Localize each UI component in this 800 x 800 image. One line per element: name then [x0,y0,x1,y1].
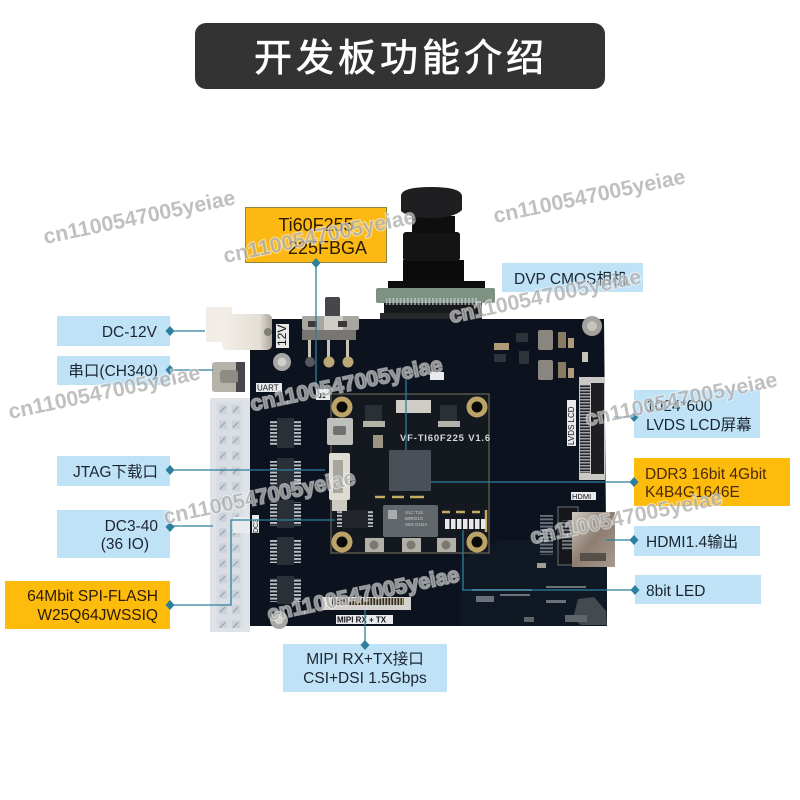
silkscreen labels: HDMI [572,492,591,501]
FPGA chip [389,450,431,491]
label: LVDS LCD [630,390,760,438]
module mounting holes [334,399,485,550]
DDR3 chip: S1C T1S [405,510,423,515]
watermarks: cn1100547005yeiae [447,264,643,328]
watermarks [6,164,779,626]
watermarks: cn1100547005yeiae [221,204,417,268]
label: HDMI [630,526,760,556]
label: DVP CMOS camera [502,263,643,292]
label: Ti60F225 FPGA: 225FBGA [288,238,367,258]
label: 8bit LED [630,575,761,604]
label: SPI flash [5,581,174,629]
JTAG connector [329,453,350,511]
silkscreen labels: J1 [318,393,326,400]
label: JTAG: JTAG下载口 [73,463,158,481]
watermarks: cn1100547005yeiae [491,164,687,228]
label: SPI flash: W25Q64JWSSIQ [37,607,158,624]
watermarks: cn1100547005yeiae [41,185,237,249]
watermarks: cn1100547005yeiae [248,352,444,416]
silkscreen labels: 12V [275,325,289,346]
label: DDR3: DDR3 16bit 4Gbit [645,466,767,483]
micro USB connector [327,418,353,445]
HDMI connector [537,507,615,568]
MIPI FPC connector [322,597,411,610]
connector lines [170,263,634,645]
DDR3 chip: B9RG1G [405,516,424,521]
screw top left [273,353,291,371]
label: LVDS LCD: LVDS LCD屏幕 [646,416,752,434]
circuit board [250,316,607,629]
label: Ti60F225 FPGA [246,208,386,268]
bottom right reflections [472,586,607,625]
label: LVDS LCD: 1024*600 [646,398,713,415]
LED row [445,519,486,529]
watermarks: cn1100547005yeiae [583,367,779,431]
label: HDMI: HDMI1.4输出 [646,533,738,551]
label: MIPI: MIPI RX+TX接口 [306,650,424,668]
label: serial port: 串口(CH340) [68,362,158,380]
camera module [376,187,495,361]
label: DC-12V [57,316,174,346]
screw top right [582,316,602,336]
silkscreen labels: DC3 [253,519,260,533]
title bar [195,23,605,89]
gold trim [375,497,486,532]
label: DDR3: K4B4G1646E [645,484,740,501]
left buffer ICs [270,418,301,604]
label: 8bit LED: 8bit LED [646,583,705,600]
watermarks: cn1100547005yeiae [528,485,724,549]
label: serial port [57,356,174,385]
FPGA core module [331,394,491,553]
40-pin IO header [210,398,250,632]
silkscreen labels: MIPI RX + TX [337,616,387,624]
label: Ti60F225 FPGA: Ti60F255 [278,215,354,235]
power section inductors [494,330,588,380]
module name: VF-TI60F225 V1.6 [400,433,491,444]
label: SPI flash: 64Mbit SPI-FLASH [27,588,158,605]
label: DC3-40: DC3-40 [105,518,158,535]
silkscreen labels: UART [257,384,279,392]
SPI flash chip [337,510,373,528]
top passives [363,400,460,448]
watermarks: cn1100547005yeiae [265,562,461,626]
screw bottom left [270,611,288,629]
silkscreen labels [252,324,596,624]
push buttons [365,538,456,552]
USB-C connector [212,362,245,392]
title bar: 开发板功能介绍 [254,38,548,80]
DC power jack [206,307,272,350]
label: DC-12V: DC-12V [102,324,158,341]
label: JTAG [57,456,174,486]
label: MIPI: CSI+DSI 1.5Gbps [303,670,427,687]
label: DC3-40: (36 IO) [101,536,149,553]
LVDS FPC connector [579,377,605,480]
DDR3 chip: S6G D1NA [405,522,427,527]
silkscreen labels: LVDS LCD [567,406,576,445]
label: DVP CMOS camera: DVP CMOS相机 [514,270,628,288]
watermarks: cn1100547005yeiae [6,360,202,424]
slide switch [302,297,359,368]
label: MIPI [283,640,447,692]
label: DDR3 [630,458,790,506]
label: DC3-40 [57,510,174,558]
watermarks: cn1100547005yeiae [161,465,357,529]
DDR3 chip [383,505,438,537]
